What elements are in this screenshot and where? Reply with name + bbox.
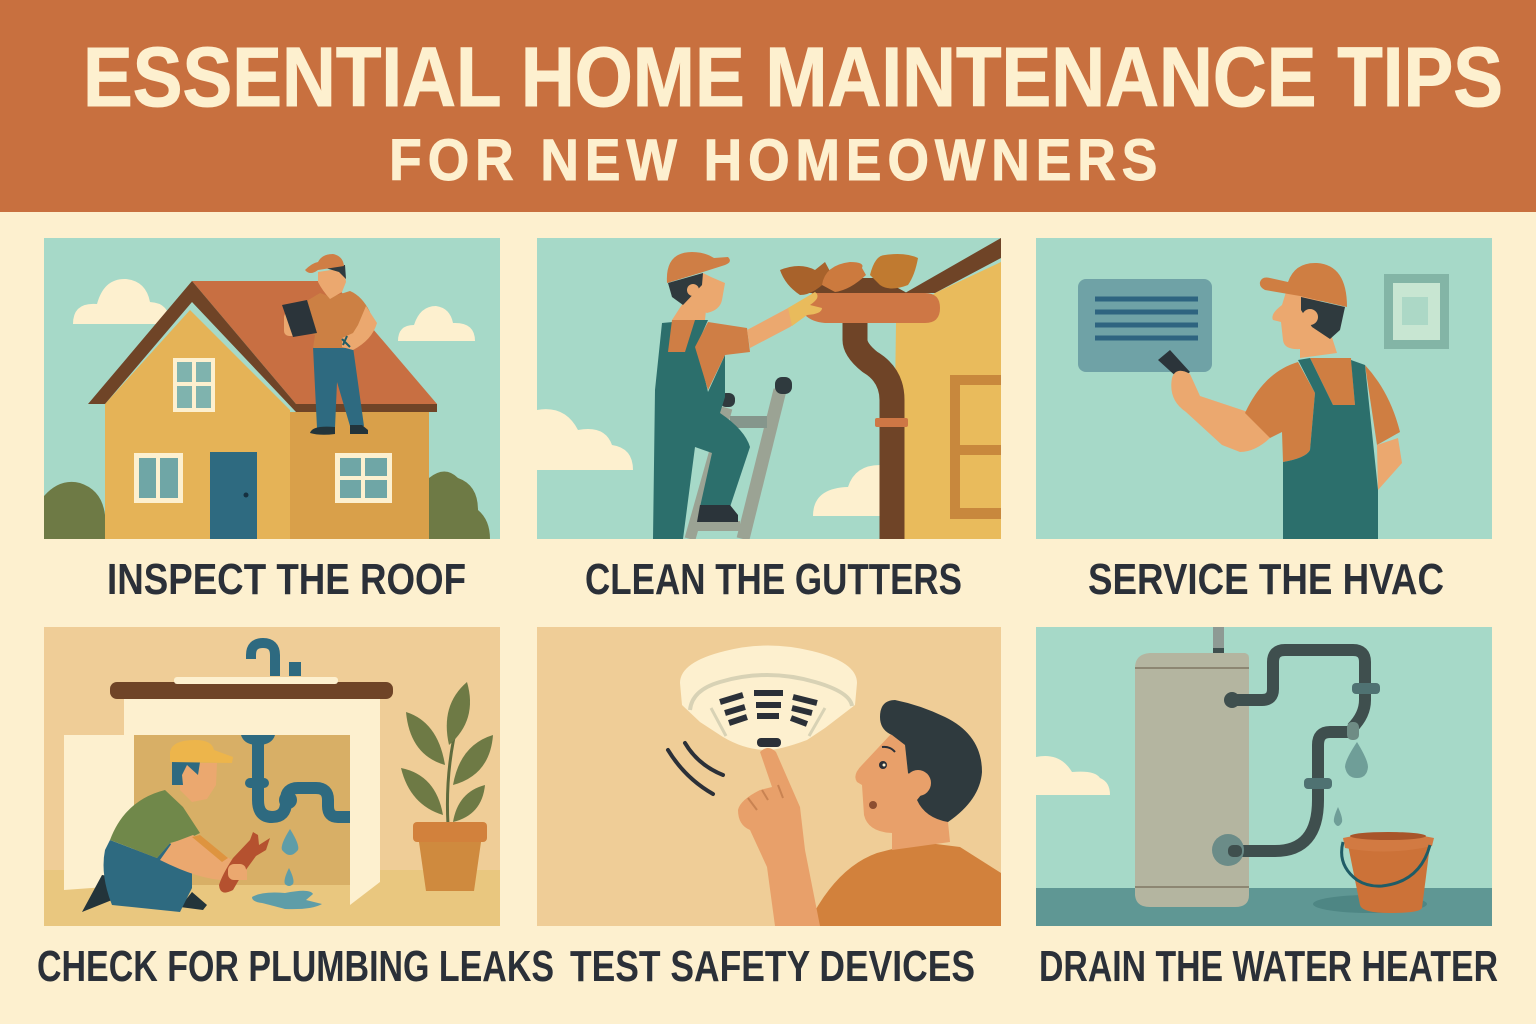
header banner <box>0 0 1536 212</box>
label: inspect the roof: INSPECT THE ROOF <box>107 555 466 604</box>
icon: worker at thermostat <box>1158 263 1402 539</box>
icon: gutter and leaves <box>780 254 940 323</box>
subtitle: FOR NEW HOMEOWNERS <box>389 128 1157 192</box>
panel: drain the water heater <box>1036 627 1492 926</box>
icon: alarm sound waves <box>668 743 723 794</box>
icon: worker on roof <box>282 254 377 435</box>
icon: cloud <box>1036 756 1110 795</box>
icon: house <box>88 281 437 539</box>
icon: clouds <box>537 409 880 516</box>
panel: check for plumbing leaks <box>44 627 500 926</box>
panel: service the hvac <box>1036 238 1492 539</box>
icon: clouds <box>73 279 475 341</box>
icon: ladder <box>690 377 792 539</box>
label: check for plumbing leaks: CHECK FOR PLUMBING LEAKS <box>37 942 554 991</box>
icon: person pressing button <box>738 700 1001 926</box>
label: service the hvac: SERVICE THE HVAC <box>1088 555 1444 604</box>
icon: wall frame <box>1384 274 1449 349</box>
icon: drain valve <box>1212 834 1244 866</box>
panel: test safety devices <box>537 627 1001 926</box>
icon: smoke detector <box>680 646 857 750</box>
icon: sink cabinet <box>64 643 393 905</box>
icon: bucket <box>1313 832 1434 913</box>
icon: bushes <box>44 472 490 539</box>
icon: pipes and valve <box>1224 650 1380 851</box>
icon: thermostat panel <box>1078 279 1212 372</box>
icon: water drops <box>1334 742 1368 826</box>
icon: downspout <box>855 323 892 539</box>
icon: water heater tank <box>1135 627 1249 907</box>
label: test safety devices: TEST SAFETY DEVICES <box>570 942 975 991</box>
icon: potted plant <box>401 682 493 891</box>
icon: crouching plumber <box>82 740 270 912</box>
icon: worker on ladder <box>653 252 822 539</box>
icon: water leak <box>252 829 322 909</box>
icon: drain pipes <box>241 735 350 817</box>
icon: house wall <box>893 238 1001 539</box>
label: clean the gutters: CLEAN THE GUTTERS <box>585 555 962 604</box>
panel: inspect the roof <box>44 238 500 539</box>
panel: clean the gutters <box>537 238 1001 539</box>
